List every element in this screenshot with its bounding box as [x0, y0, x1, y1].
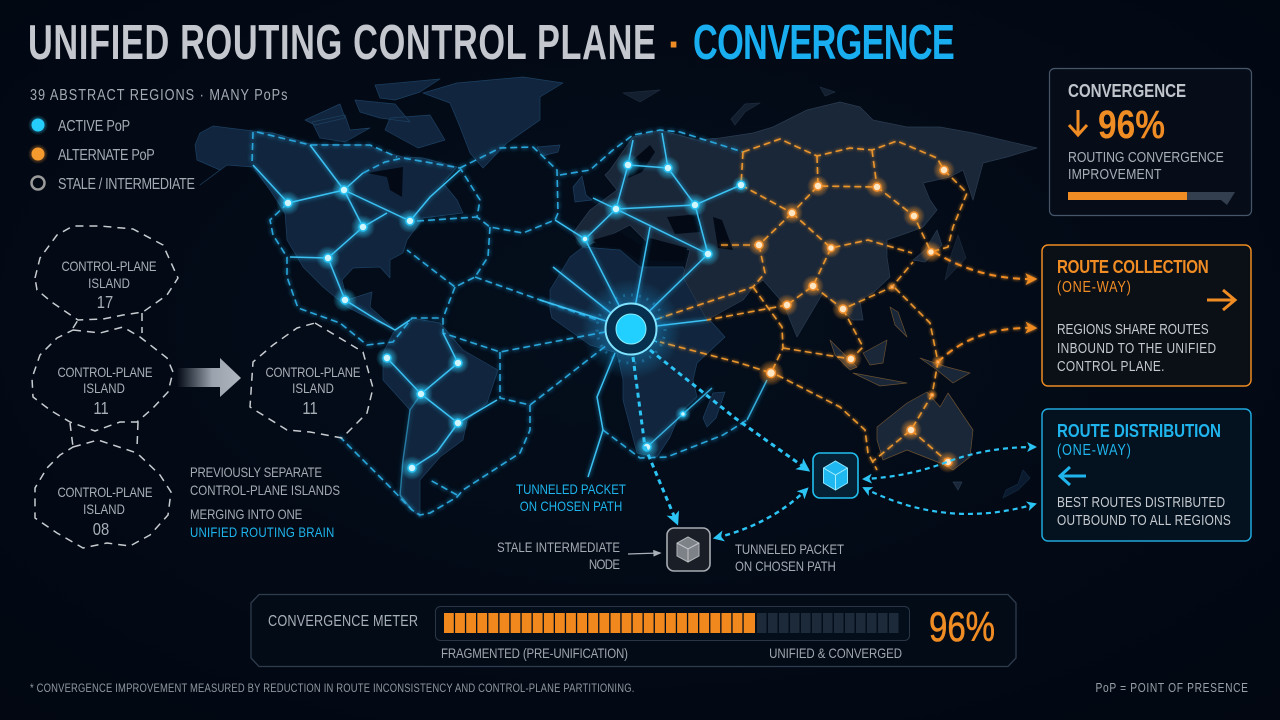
tunneled packet label left: ON CHOSEN PATH [520, 498, 622, 514]
panel: route collection: ROUTE COLLECTION [1057, 257, 1209, 277]
island labels: 17 [97, 293, 113, 312]
island labels: 08 [93, 520, 109, 539]
meter segments [444, 613, 898, 633]
map routes: dashed blue borders [252, 130, 747, 515]
map routes: active solid blue [253, 133, 767, 510]
island labels: CONTROL-PLANE [61, 258, 157, 274]
panel: convergence meter: UNIFIED & CONVERGED [769, 645, 902, 661]
panel: route collection: (ONE-WAY) [1057, 279, 1131, 296]
hub node [581, 279, 681, 379]
tunneled packet label right: ON CHOSEN PATH [735, 558, 836, 574]
panel: convergence: ROUTING CONVERGENCE [1068, 149, 1224, 165]
panel: convergence: IMPROVEMENT [1068, 166, 1162, 182]
islands caption: CONTROL-PLANE ISLANDS [190, 482, 340, 498]
tunneled packet label right: TUNNELED PACKET [735, 541, 844, 557]
islands caption: MERGING INTO ONE [190, 506, 302, 522]
tunneled packet label right [735, 541, 844, 574]
merge arrow [177, 358, 241, 397]
active PoP nodes [276, 153, 750, 480]
stale node [667, 528, 710, 571]
island labels [57, 258, 361, 539]
island labels: ISLAND [88, 275, 130, 291]
arrows to route collection [934, 252, 1035, 362]
legend: STALE / INTERMEDIATE [58, 176, 195, 193]
blue cube node [813, 453, 858, 498]
panel: route distribution: OUTBOUND TO ALL REGIONS [1057, 512, 1231, 528]
map routes: alternate orange [660, 139, 967, 470]
panel: convergence meter: 96% [929, 603, 995, 650]
panel: convergence [1050, 68, 1252, 216]
panel: route distribution: BEST ROUTES DISTRIBUTED [1057, 494, 1225, 510]
island labels: 11 [302, 399, 318, 418]
tunneled packet label left: TUNNELED PACKET [516, 481, 626, 497]
island labels: ISLAND [83, 380, 125, 396]
title: UNIFIED ROUTING CONTROL PLANE [28, 15, 656, 69]
panel: convergence meter: FRAGMENTED (PRE-UNIFICATION) [441, 645, 628, 661]
tunneled paths [633, 350, 1035, 538]
PoP definition: PoP = POINT OF PRESENCE [1095, 682, 1248, 695]
panel: route collection: REGIONS SHARE ROUTES [1057, 321, 1209, 337]
panel: route distribution: ROUTE DISTRIBUTION [1057, 421, 1221, 441]
panel: convergence: CONVERGENCE [1068, 81, 1186, 101]
control-plane islands [32, 226, 373, 548]
stale intermediate label: STALE INTERMEDIATE [497, 539, 620, 555]
panel: route distribution: (ONE-WAY) [1057, 442, 1131, 459]
world map [195, 77, 1037, 517]
islands caption: UNIFIED ROUTING BRAIN [190, 524, 334, 540]
island labels: 11 [93, 399, 109, 418]
inland seas [367, 167, 403, 197]
panel: convergence meter: CONVERGENCE METER [268, 613, 418, 630]
island labels: CONTROL-PLANE [57, 484, 153, 500]
panel: route collection: CONTROL PLANE. [1057, 358, 1164, 374]
panel: route collection [1042, 245, 1251, 386]
footnote: * CONVERGENCE IMPROVEMENT MEASURED BY REDUCTION IN ROUTE INCONSISTENCY AND CONTROL-PLANE PARTITIONING. [30, 682, 634, 695]
panel: route collection: INBOUND TO THE UNIFIED [1057, 340, 1216, 356]
stale intermediate label: NODE [589, 556, 620, 572]
island labels: ISLAND [83, 501, 125, 517]
panel: convergence: 96% [1098, 103, 1165, 147]
legend: ACTIVE PoP [58, 118, 130, 135]
alternate PoP nodes [748, 159, 959, 473]
island labels: CONTROL-PLANE [57, 364, 153, 380]
tunneled packet label left [516, 481, 626, 514]
title: · [668, 23, 681, 67]
islands caption [190, 464, 340, 540]
title: CONVERGENCE [693, 15, 955, 69]
panel: route distribution [1042, 409, 1251, 541]
island labels: CONTROL-PLANE [265, 364, 361, 380]
legend [28, 87, 287, 193]
island labels: ISLAND [292, 380, 334, 396]
legend: 39 ABSTRACT REGIONS · MANY PoPs [30, 87, 287, 104]
panel: convergence meter [251, 594, 1016, 666]
islands caption: PREVIOUSLY SEPARATE [190, 464, 322, 480]
stale intermediate label [497, 539, 660, 572]
title [28, 15, 955, 69]
legend: ALTERNATE PoP [58, 147, 155, 164]
